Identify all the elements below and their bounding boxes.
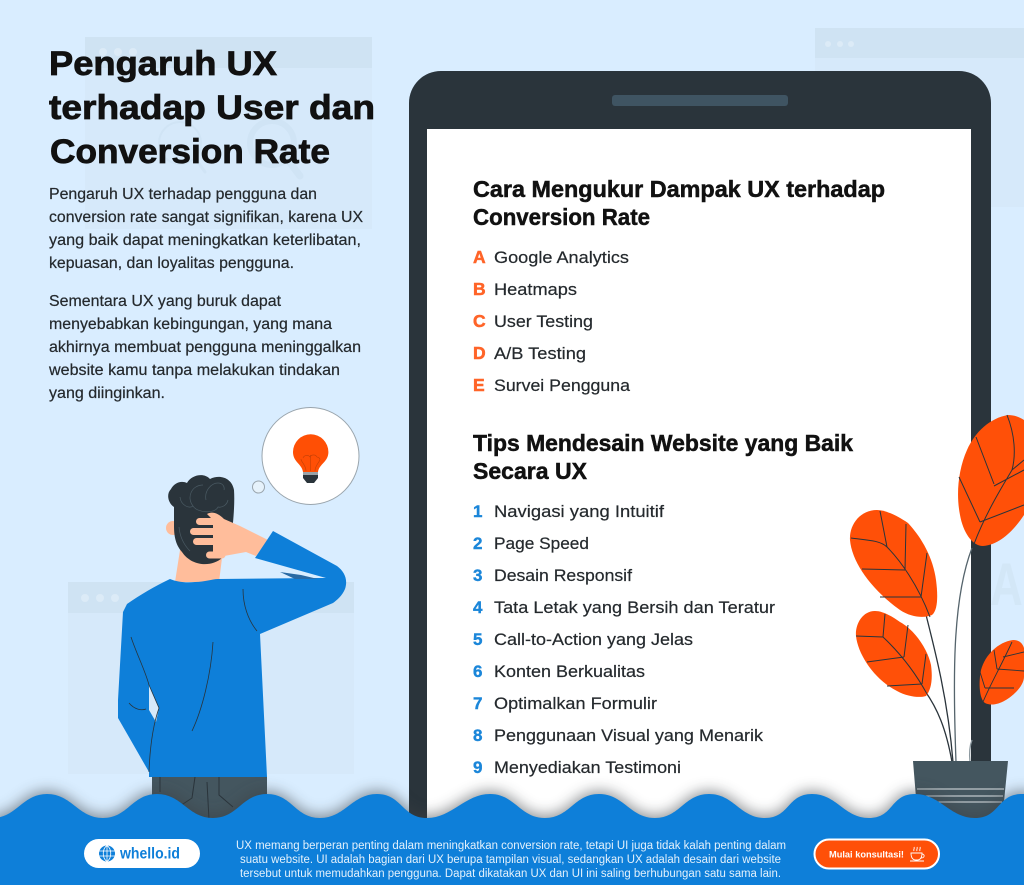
list: measurement methods: A/B Testing bbox=[494, 344, 586, 363]
title: Conversion Rate bbox=[50, 133, 330, 171]
background window: behind the person bbox=[68, 582, 354, 774]
second paragraph: website kamu tanpa melakukan tindakan bbox=[48, 362, 340, 379]
potted plant bbox=[850, 415, 1024, 822]
list: design tips: 6 bbox=[473, 662, 482, 681]
footer note: suatu website. UI adalah bagian dari UX berupa tampilan visual, sedangkan UX adalah desain dari website bbox=[240, 854, 781, 866]
list: design tips: 3 bbox=[473, 566, 482, 585]
logo pill: whello.id bbox=[84, 839, 200, 868]
second paragraph: akhirnya membuat pengguna meninggalkan bbox=[49, 339, 361, 356]
list: design tips: 1 bbox=[473, 502, 482, 521]
list: design tips: Penggunaan Visual yang Menarik bbox=[494, 726, 764, 745]
icon: globe bbox=[99, 846, 115, 862]
intro paragraph: yang baik dapat meningkatkan keterlibatan, bbox=[49, 232, 361, 249]
footer wave band bbox=[0, 794, 1024, 885]
list: measurement methods bbox=[473, 247, 631, 395]
list: design tips: Navigasi yang Intuitif bbox=[494, 502, 664, 521]
list: design tips: 4 bbox=[473, 598, 483, 617]
heading: website design tips bbox=[473, 430, 853, 484]
phone device bbox=[409, 71, 991, 830]
list: design tips: Konten Berkualitas bbox=[494, 662, 645, 681]
plant stems bbox=[924, 548, 972, 762]
call-to-action button bbox=[814, 840, 939, 868]
hair bbox=[168, 475, 234, 564]
second paragraph: menyebabkan kebingungan, yang mana bbox=[49, 316, 332, 333]
list: measurement methods: Heatmaps bbox=[494, 280, 577, 299]
intro paragraph: kepuasan, dan loyalitas pengguna. bbox=[49, 255, 294, 272]
icon: light bulb bbox=[293, 434, 328, 483]
phone screen bbox=[427, 129, 971, 830]
intro paragraph: conversion rate sangat signifikan, karena UX bbox=[49, 209, 364, 226]
list: design tips: Desain Responsif bbox=[494, 566, 632, 585]
list: measurement methods: Survei Pengguna bbox=[494, 376, 631, 395]
call-to-action button: Mulai konsultasi! bbox=[829, 850, 904, 860]
list: design tips: 9 bbox=[473, 758, 482, 777]
heading: measuring UX impact: Conversion Rate bbox=[473, 204, 650, 230]
list: measurement methods: B bbox=[473, 279, 486, 299]
second paragraph: Sementara UX yang buruk dapat bbox=[49, 293, 282, 310]
title: terhadap User dan bbox=[49, 89, 375, 127]
footer note: tersebut untuk memudahkan pengguna. Dapat dikatakan UX dan UI ini saling berhubungan satu sama lain. bbox=[240, 868, 781, 880]
background window: top right bbox=[815, 28, 1024, 207]
list: measurement methods: E bbox=[473, 375, 485, 395]
list: design tips: Tata Letak yang Bersih dan Teratur bbox=[494, 598, 775, 617]
neck and ear bbox=[166, 521, 223, 582]
hand and forearm bbox=[194, 513, 268, 558]
list: design tips: 2 bbox=[473, 534, 482, 553]
list: design tips: 7 bbox=[473, 694, 482, 713]
list: design tips bbox=[473, 502, 775, 777]
leaf: small right bbox=[980, 640, 1024, 705]
leaf: upper left bbox=[850, 510, 937, 617]
heading: website design tips: Tips Mendesain Website yang Baik bbox=[473, 430, 853, 456]
list: design tips: Optimalkan Formulir bbox=[494, 694, 657, 713]
title bbox=[49, 45, 375, 171]
second paragraph: yang diinginkan. bbox=[49, 385, 165, 402]
person scratching head, seen from behind bbox=[118, 475, 346, 822]
phone speaker bbox=[612, 95, 788, 106]
plant pot bbox=[913, 761, 1008, 822]
list: design tips: 8 bbox=[473, 726, 482, 745]
list: design tips: Menyediakan Testimoni bbox=[494, 758, 681, 777]
intro paragraph: Pengaruh UX terhadap pengguna dan bbox=[49, 186, 317, 203]
footer note: UX memang berperan penting dalam meningkatkan conversion rate, tetapi UI juga tidak kalah penting dalam bbox=[236, 840, 786, 852]
list: measurement methods: User Testing bbox=[494, 312, 593, 331]
list: measurement methods: D bbox=[473, 343, 486, 363]
list: design tips: 5 bbox=[473, 630, 482, 649]
list: measurement methods: Google Analytics bbox=[494, 248, 629, 267]
logo pill: whello.id: whello.id bbox=[119, 846, 180, 862]
thought bubble with light bulb bbox=[252, 408, 359, 504]
list: design tips: Call-to-Action yang Jelas bbox=[494, 630, 693, 649]
trousers bbox=[152, 777, 267, 822]
background window: top left with magnifiers bbox=[85, 37, 372, 229]
title: Pengaruh UX bbox=[49, 45, 277, 83]
list: design tips: Page Speed bbox=[494, 534, 589, 553]
heading: measuring UX impact bbox=[473, 176, 885, 230]
intro paragraph bbox=[49, 186, 364, 272]
leaf: top right bbox=[958, 415, 1024, 546]
heading: measuring UX impact: Cara Mengukur Dampak UX terhadap bbox=[473, 176, 885, 202]
heading: website design tips: Secara UX bbox=[473, 458, 588, 484]
blue sweater bbox=[118, 531, 346, 777]
footer note bbox=[236, 840, 786, 880]
list: measurement methods: C bbox=[473, 311, 486, 331]
list: measurement methods: A bbox=[473, 247, 486, 267]
icon: coffee cup bbox=[910, 847, 924, 861]
second paragraph bbox=[48, 293, 361, 402]
leaf: lower left bbox=[856, 611, 932, 697]
wave shadow glow bbox=[0, 791, 1024, 885]
